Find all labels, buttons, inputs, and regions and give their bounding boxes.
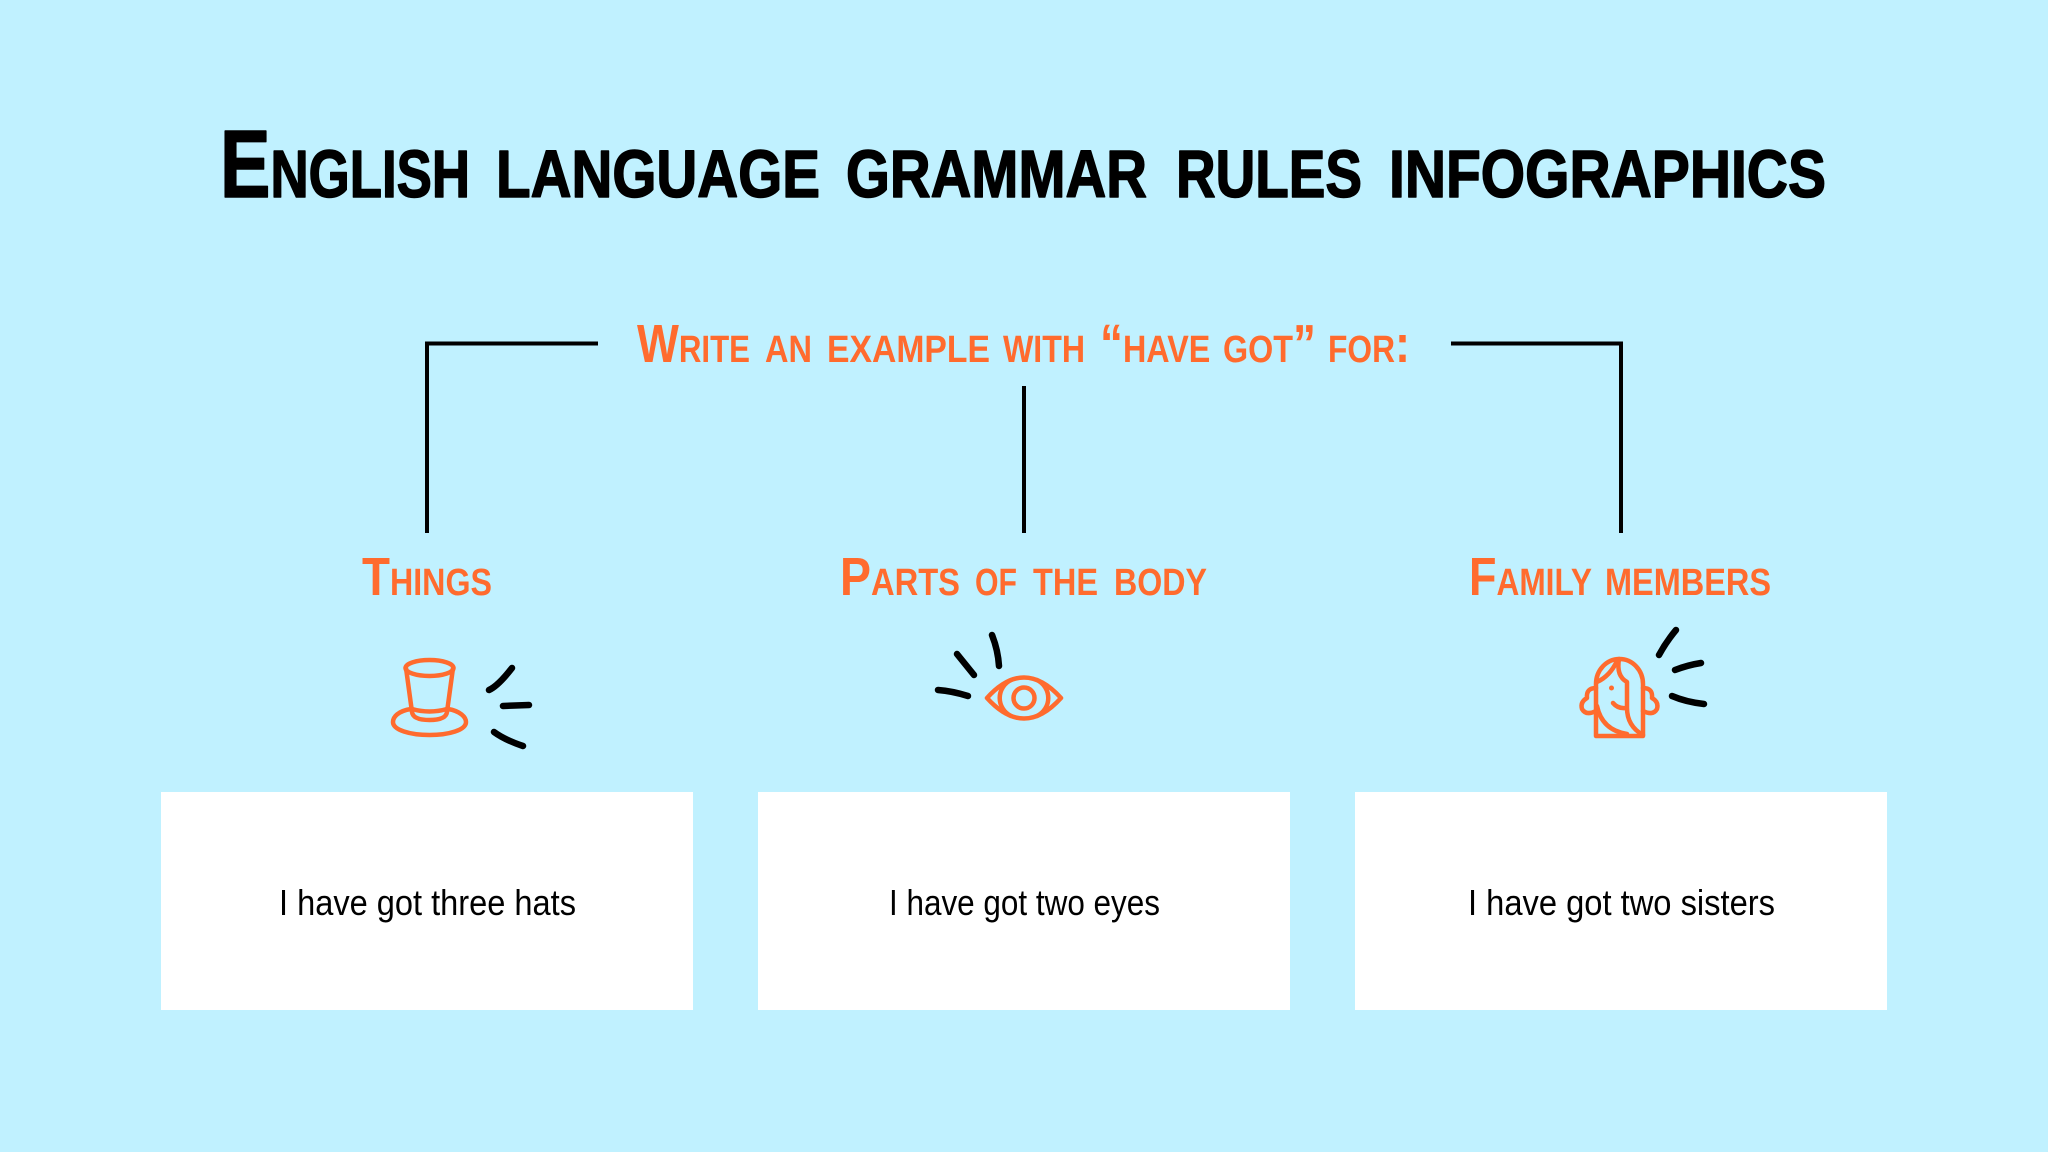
heading: family members: members — [1605, 547, 1771, 607]
heading: parts of the body: body — [1114, 547, 1207, 607]
heading: family members: Family — [1469, 547, 1592, 607]
subheading: example — [827, 314, 990, 374]
title: rules — [1176, 111, 1362, 218]
icon: eye — [938, 635, 1061, 718]
heading: parts of the body: Parts — [840, 547, 960, 607]
connector: right — [1451, 344, 1621, 533]
title: grammar — [846, 111, 1147, 218]
card: family members: I have got two sisters — [1468, 882, 1775, 923]
column: family members — [1355, 547, 1887, 1010]
subheading: with — [1003, 314, 1085, 374]
title — [220, 111, 1826, 218]
heading: parts of the body: the — [1033, 547, 1098, 607]
title: English — [220, 111, 470, 218]
subheading: for: — [1328, 314, 1410, 374]
heading: parts of the body: of — [975, 547, 1017, 607]
subheading: Write — [637, 314, 750, 374]
connector: center — [1022, 386, 1026, 533]
heading: family members — [1469, 547, 1771, 607]
column: things — [161, 547, 693, 1010]
icon: top hat — [393, 660, 529, 746]
heading: things: Things — [362, 547, 492, 607]
connector: left — [427, 344, 598, 533]
card: parts of the body — [758, 792, 1290, 1010]
card: family members — [1355, 792, 1887, 1010]
title: infographics — [1389, 111, 1826, 218]
card: parts of the body: I have got two eyes — [889, 882, 1160, 923]
card: things — [161, 792, 693, 1010]
heading: parts of the body — [840, 547, 1207, 607]
icon: woman — [1582, 630, 1704, 736]
subheading: an — [765, 314, 812, 374]
subheading — [637, 314, 1410, 374]
column: parts of the body — [758, 547, 1290, 1010]
subheading: “have got” — [1100, 314, 1316, 374]
title: language — [496, 111, 820, 218]
card: things: I have got three hats — [279, 882, 576, 923]
